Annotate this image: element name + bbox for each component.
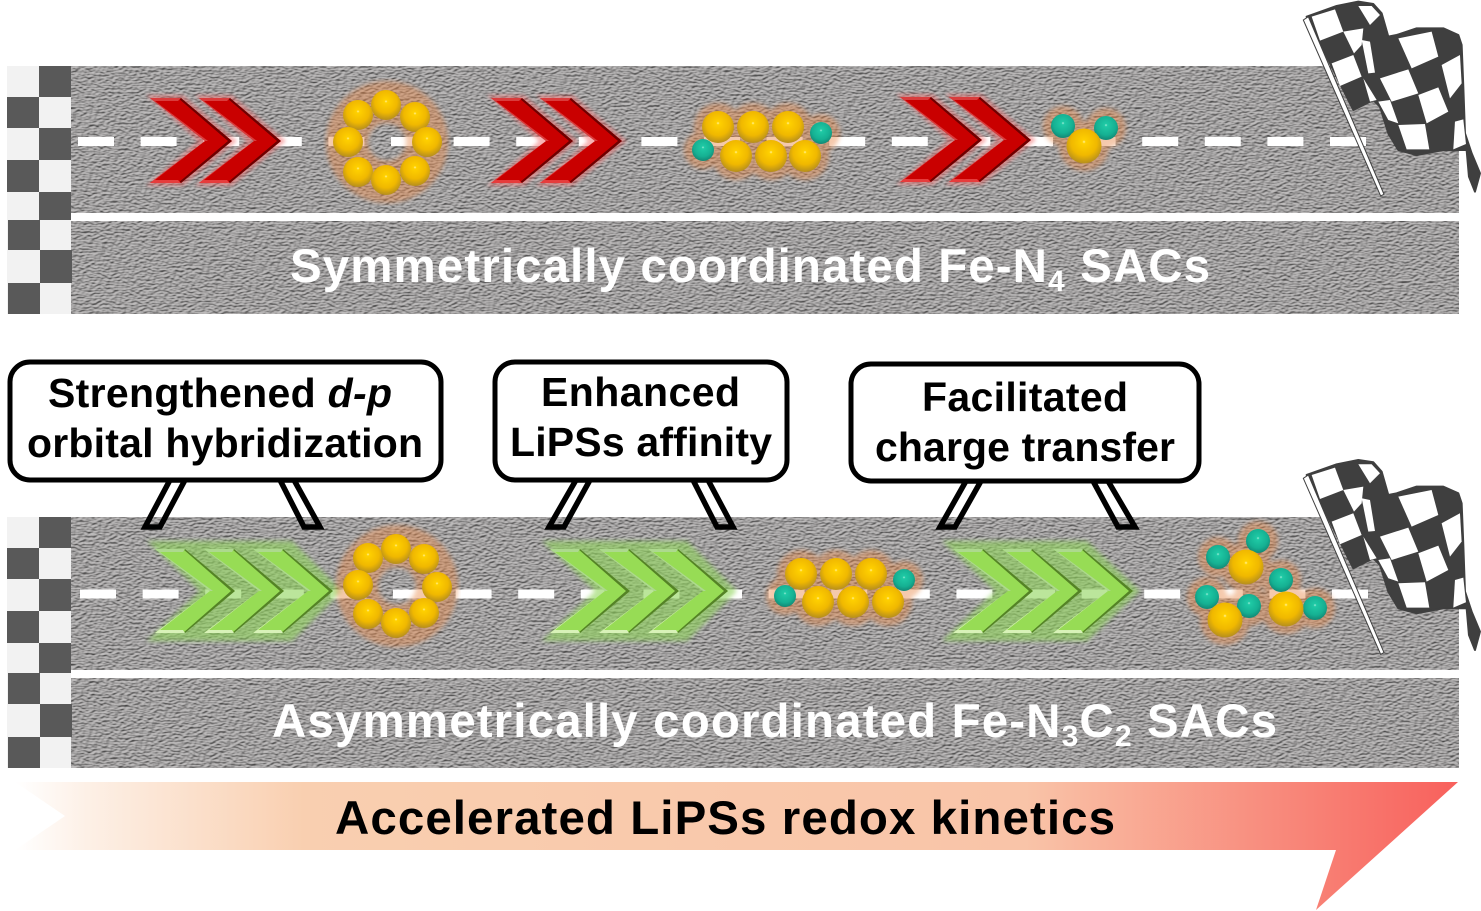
callout: LiPSs affinity: Enhanced <box>541 369 740 415</box>
callout: d-p orbital hybridization <box>10 362 441 527</box>
track title bottom: 2 <box>1115 720 1132 753</box>
track surface <box>71 517 1459 768</box>
track title bottom: C <box>1079 695 1114 748</box>
callout: LiPSs affinity <box>495 362 787 527</box>
track title top: 4 <box>1048 265 1065 298</box>
molecule: chain bottom <box>766 550 923 626</box>
checkered flag top <box>1303 2 1480 196</box>
top race track <box>7 66 1459 314</box>
track title top: Symmetrically coordinated Fe-N <box>290 240 1047 293</box>
gradient arrow: accelerated kinetics <box>15 782 1458 910</box>
callout: d-p orbital hybridization: Strengthened d-p <box>48 370 392 416</box>
track edge line <box>71 670 1459 678</box>
track edge line <box>71 213 1459 221</box>
callout: LiPSs affinity: LiPSs affinity <box>510 419 772 465</box>
start checker strip <box>7 66 72 314</box>
start checker strip <box>7 517 72 768</box>
callout: charge transfer: charge transfer <box>875 424 1175 470</box>
green chevron arrows bottom <box>147 541 1140 641</box>
bottom race track <box>7 517 1459 768</box>
checkered flag bottom <box>1303 460 1480 654</box>
lane dashes <box>78 137 1367 146</box>
lane dashes <box>80 590 1369 598</box>
track title bottom: Asymmetrically coordinated Fe-N <box>272 695 1060 748</box>
track title bottom: 3 <box>1062 720 1078 753</box>
molecule: ring bottom <box>343 534 452 638</box>
callout: charge transfer <box>851 364 1199 527</box>
molecule: branched bottom <box>1187 521 1335 645</box>
callout: d-p orbital hybridization: orbital hybridization <box>27 420 423 466</box>
callout: charge transfer: Facilitated <box>922 374 1128 420</box>
molecule: small top <box>1043 106 1126 171</box>
molecule: chain top <box>684 103 840 180</box>
gradient arrow: accelerated kinetics: Accelerated LiPSs redox kinetics <box>335 792 1115 845</box>
red chevron arrows top <box>146 94 1036 186</box>
track title top: SACs <box>1066 240 1210 293</box>
track title bottom: SACs <box>1133 695 1277 748</box>
track surface <box>71 66 1459 314</box>
molecule: ring top <box>333 90 442 195</box>
